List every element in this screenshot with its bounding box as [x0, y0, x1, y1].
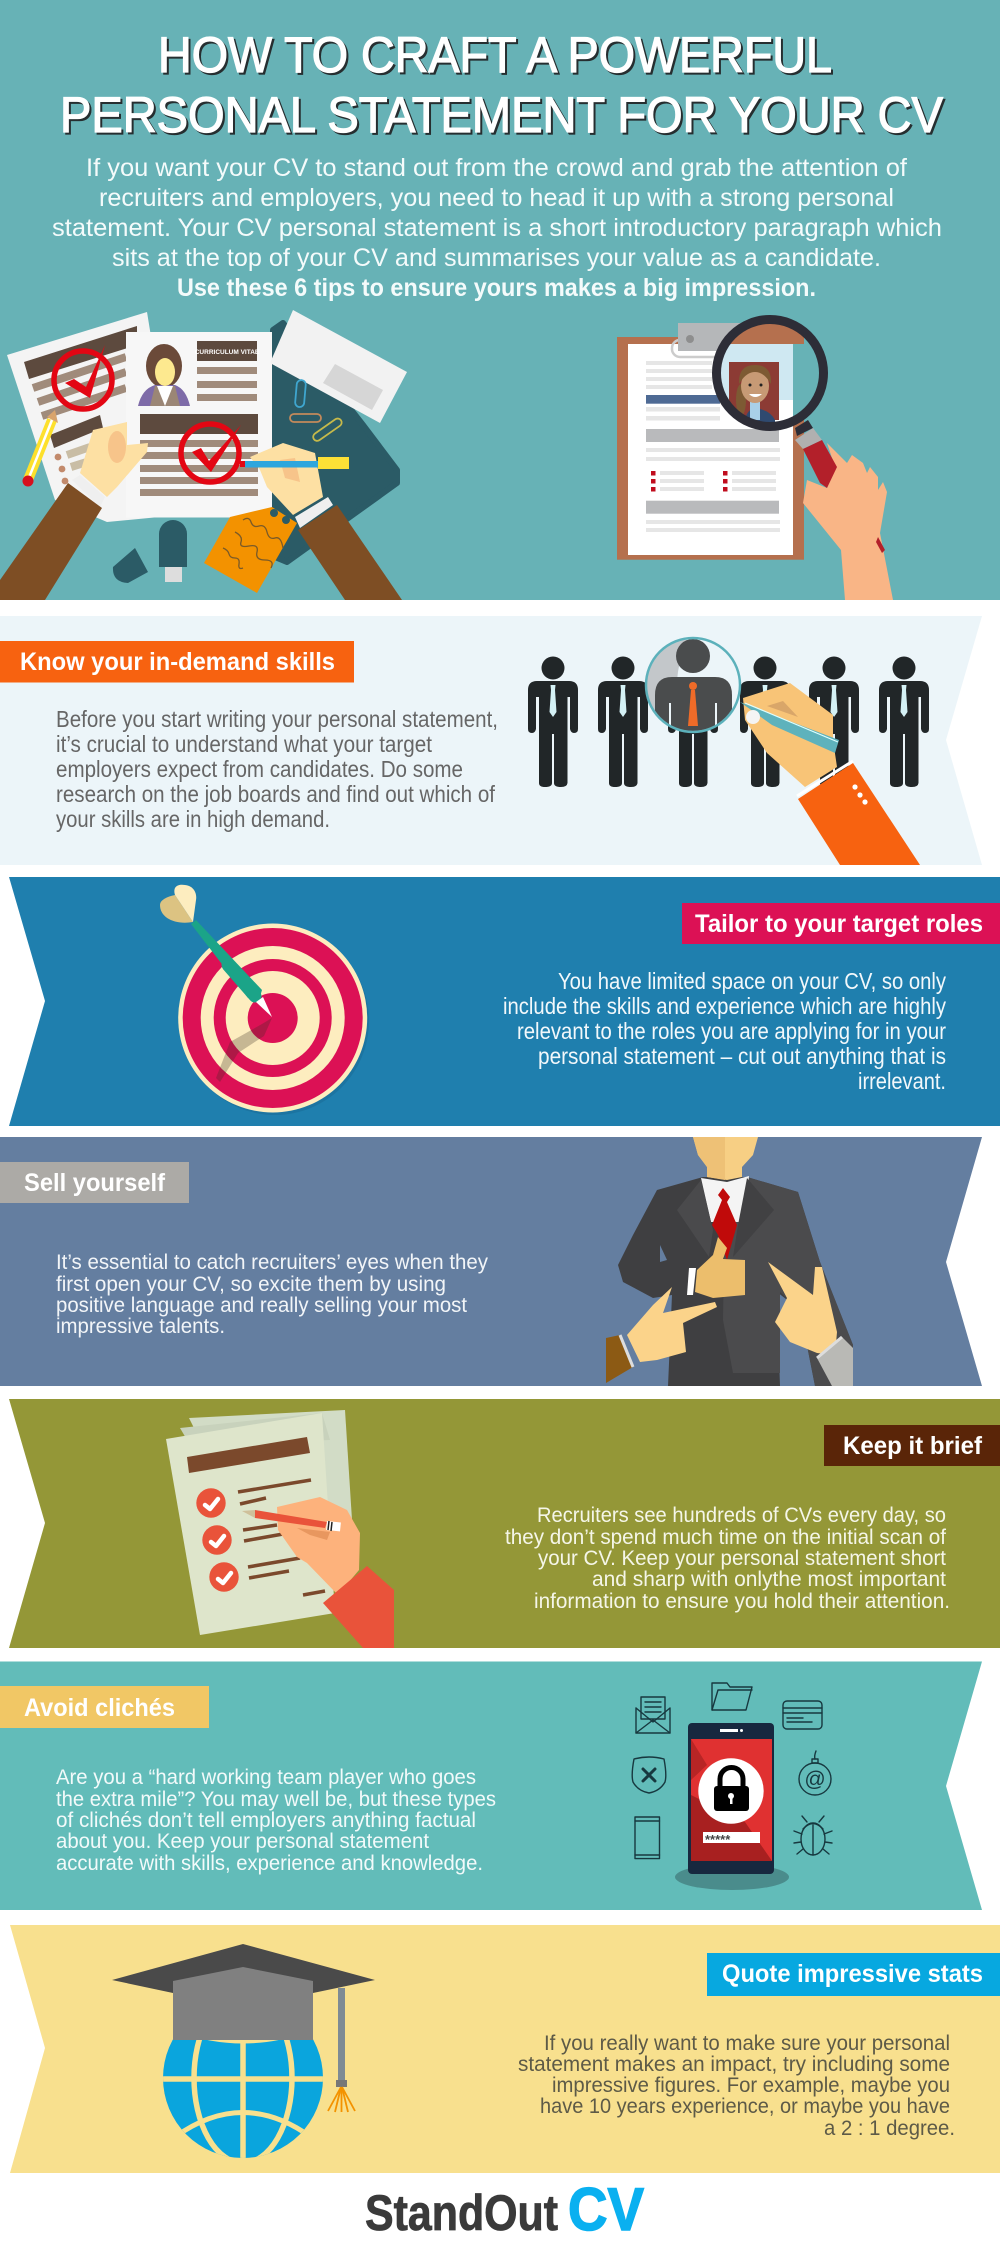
- body text: statement makes an impact, try including some: [518, 2052, 950, 2076]
- body text: employers expect from candidates. Do some: [56, 756, 463, 782]
- body text: your skills are in high demand.: [56, 806, 330, 832]
- tag heading: [0, 1162, 189, 1203]
- body text: and sharp with onlythe most important: [592, 1567, 946, 1591]
- tag heading: Avoid clichés: [24, 1694, 175, 1722]
- body text: they don’t spend much time on the initial scan of: [505, 1525, 946, 1549]
- red check mark 2: [181, 424, 241, 482]
- face and neck: [693, 1137, 758, 1180]
- title: HOW TO CRAFT A POWERFUL: [158, 27, 832, 83]
- handle end: [876, 537, 885, 553]
- icon: shield: [632, 1757, 666, 1793]
- tag heading: Tailor to your target roles: [695, 910, 983, 938]
- thumbs-up hand: [695, 1237, 745, 1298]
- panel: avoid cliches: [0, 1662, 982, 1910]
- tag heading: Know your in-demand skills: [20, 648, 335, 676]
- tag heading: [0, 1686, 209, 1728]
- body text: impressive figures. For example, maybe you: [552, 2073, 950, 2097]
- body text: of clichés don’t tell employers anything factual: [56, 1808, 476, 1832]
- title: PERSONAL STATEMENT FOR YOUR CV: [60, 87, 944, 143]
- logo: StandOut CV: StandOut: [365, 2185, 558, 2241]
- icon: row of candidates: [528, 656, 929, 787]
- body text: [56, 706, 498, 832]
- icon: locked phone: *****: [705, 1832, 731, 1847]
- icon: dartboard: [178, 924, 369, 1115]
- body text: the extra mile”? You may well be, but these types: [56, 1787, 496, 1811]
- back CV sheet: [7, 312, 180, 522]
- icon: bug: [794, 1816, 832, 1855]
- body text: irrelevant.: [858, 1068, 946, 1094]
- magnifier: [710, 310, 837, 488]
- orange note: [204, 507, 297, 593]
- body text: Before you start writing your personal statement,: [56, 706, 498, 732]
- tag heading: Sell yourself: [24, 1169, 166, 1197]
- icon: folder: [712, 1683, 752, 1710]
- panel: tailor to your target roles: [9, 877, 1000, 1126]
- title: [60, 27, 944, 143]
- red check mark 1: [54, 345, 112, 409]
- illustration: desk with CV and hands: [0, 310, 407, 600]
- body text: positive language and really selling your most: [56, 1293, 467, 1317]
- body text: relevant to the roles you are applying for in your: [517, 1018, 946, 1044]
- USB stick: [113, 520, 187, 583]
- icon: hand with pen and orange sleeve: [740, 683, 920, 865]
- body text: a 2 : 1 degree.: [824, 2116, 955, 2140]
- text lines: [238, 1480, 325, 1595]
- paper stack: [189, 1410, 352, 1530]
- illustration: checklist and hand: [166, 1410, 394, 1648]
- icon: phone outline: [635, 1817, 660, 1859]
- intro paragraph: recruiters and employers, you need to head it up with a strong personal: [99, 184, 894, 212]
- tag heading: [824, 1425, 1000, 1466]
- body text: accurate with skills, experience and knowledge.: [56, 1851, 483, 1875]
- icon: at-sign bomb: [799, 1751, 831, 1795]
- icon: credit card: [783, 1701, 822, 1729]
- body text: first open your CV, so excite them by using: [56, 1272, 446, 1296]
- body text: [56, 1250, 488, 1338]
- front CV sheet: [126, 332, 272, 518]
- icon: dart: [160, 885, 272, 1017]
- front CV sheet: CURRICULUM VITAE: [195, 349, 260, 356]
- body text: Are you a “hard working team player who goes: [56, 1765, 476, 1789]
- left pointing hand: [627, 1287, 717, 1362]
- panel: quote impressive stats: [10, 1925, 1000, 2173]
- sleeve: [323, 1566, 394, 1648]
- intro paragraph: [52, 154, 942, 302]
- body text: [518, 2031, 955, 2140]
- body text: It’s essential to catch recruiters’ eyes when they: [56, 1250, 488, 1274]
- tag heading: [0, 641, 354, 682]
- hand with pencil: [277, 1497, 360, 1595]
- illustration: clipboard and magnifier: [617, 310, 893, 600]
- shirt and tie: [701, 1176, 749, 1222]
- tag heading: [707, 1953, 1000, 1996]
- icon: envelope with letter: [636, 1697, 670, 1733]
- panel: sell yourself: [0, 1137, 982, 1386]
- right pointing hand: [768, 1262, 837, 1355]
- body text: You have limited space on your CV, so only: [558, 968, 946, 994]
- body text: [503, 968, 946, 1094]
- suit: [618, 1177, 853, 1386]
- icon: graduation cap: [112, 1944, 375, 2112]
- body text: [505, 1503, 950, 1613]
- header panel: [0, 0, 1000, 600]
- panel: keep it brief: [9, 1399, 1000, 1648]
- right hand, pen and sleeve: [240, 443, 402, 600]
- icon: at-sign bomb: @: [804, 1768, 826, 1791]
- pencil: [22, 410, 58, 486]
- body text: about you. Keep your personal statement: [56, 1829, 429, 1853]
- body text: research on the job boards and find out which of: [56, 781, 496, 807]
- title bar: [187, 1437, 310, 1473]
- intro paragraph: Use these 6 tips to ensure yours makes a big impression.: [177, 274, 816, 302]
- tag heading: [682, 903, 1000, 944]
- body text: have 10 years experience, or maybe you have: [540, 2094, 950, 2118]
- dark folder: [272, 323, 397, 562]
- body text: impressive talents.: [56, 1314, 225, 1338]
- lapels: [677, 1180, 713, 1257]
- intro paragraph: statement. Your CV personal statement is a short introductory paragraph which: [52, 214, 942, 242]
- body text: [56, 1765, 496, 1875]
- icon: locked phone: [675, 1723, 789, 1890]
- icon: magnifier on candidate: [644, 636, 742, 734]
- tag heading: Keep it brief: [843, 1432, 983, 1460]
- check circles: [196, 1488, 239, 1592]
- clipboard: [617, 323, 804, 560]
- body text: your CV. Keep your personal statement short: [538, 1546, 946, 1570]
- logo: StandOut CV: [365, 2176, 644, 2243]
- body text: personal statement – cut out anything that is: [538, 1043, 946, 1069]
- logo: StandOut CV: CV: [568, 2176, 644, 2243]
- body text: information to ensure you hold their attention.: [534, 1589, 950, 1613]
- envelope: [270, 310, 407, 423]
- intro paragraph: If you want your CV to stand out from the crowd and grab the attention of: [86, 154, 907, 182]
- hand holding magnifier: [803, 443, 893, 600]
- panel: know your in-demand skills: [0, 616, 982, 865]
- body text: Recruiters see hundreds of CVs every day, so: [537, 1503, 946, 1527]
- paper clips: [290, 380, 343, 442]
- left hand and sleeve: [0, 422, 148, 600]
- body text: If you really want to make sure your personal: [544, 2031, 950, 2055]
- body text: include the skills and experience which are highly: [503, 993, 946, 1019]
- illustration: businessman with pointing hands: [606, 1137, 853, 1386]
- body text: it’s crucial to understand what your target: [56, 731, 433, 757]
- intro paragraph: sits at the top of your CV and summarises your value as a candidate.: [112, 244, 881, 272]
- icon: globe: [163, 2039, 323, 2158]
- tag heading: Quote impressive stats: [722, 1960, 983, 1988]
